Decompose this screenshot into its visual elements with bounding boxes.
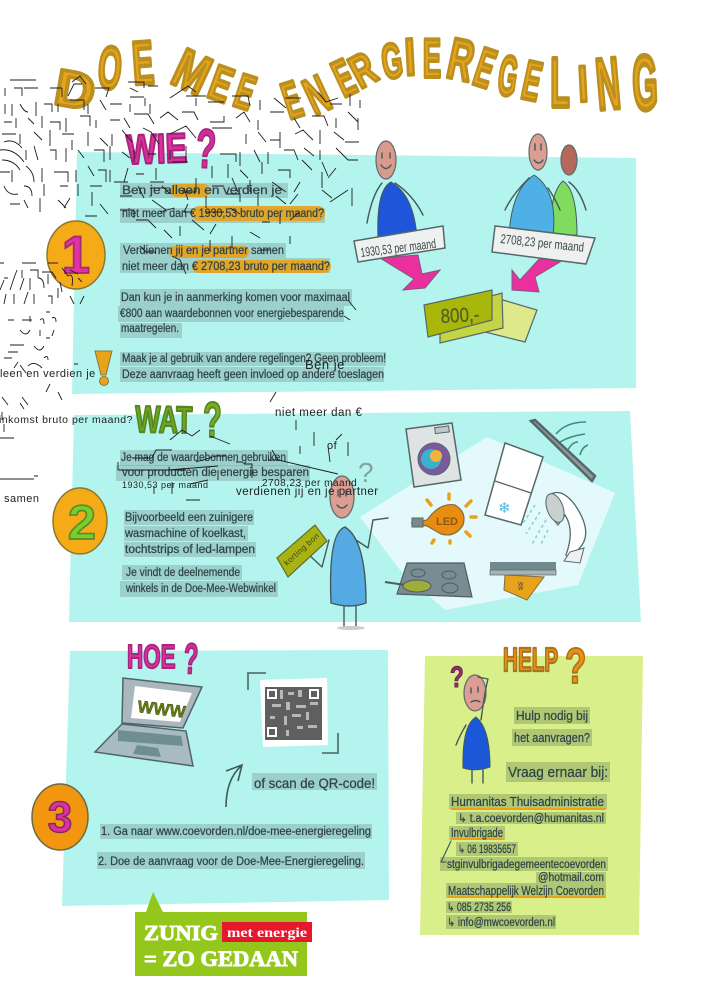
icon: scan brackets	[248, 673, 338, 753]
title: R	[442, 25, 480, 94]
text block: voucher amount: maatregelen.	[121, 323, 179, 335]
person: single: 1930,53 per maand	[360, 236, 437, 260]
text block: contacts: ↳ t.a.coevorden@humanitas.nl	[458, 813, 604, 825]
icon: vouchers: 800,-	[440, 303, 480, 327]
arrow: to qr code	[226, 765, 242, 807]
text block: voucher amount: Dan kun je in aanmerking komen voor maximaal	[121, 292, 350, 304]
figure: couple	[492, 134, 595, 292]
heading: wat: WAT	[135, 397, 193, 441]
badge: 1: 1	[62, 225, 90, 284]
title: L	[550, 45, 570, 122]
icon: sign	[277, 525, 327, 577]
heading: hoe: HOE	[127, 639, 176, 676]
ghost text fragments: verdienen jij en je partner	[236, 486, 379, 498]
title: M	[164, 37, 220, 107]
title: E	[202, 55, 240, 113]
text block: examples: tochtstrips of led-lampen	[125, 544, 255, 556]
text block: wie income: niet meer dan € 1930,53 bruto per maand?	[122, 208, 324, 220]
text block: wie income: Verdienen jij en je partner samen	[123, 245, 284, 257]
heading: help: ?	[565, 639, 586, 695]
text block: contacts: ↳ 06 19835657	[458, 844, 516, 856]
panel: wat	[69, 411, 641, 622]
text block: contacts: Maatschappelijk Welzijn Coevorden	[448, 884, 604, 898]
text block: contacts: stginvulbrigadegemeentecoevorden	[447, 859, 606, 871]
title: D	[50, 59, 99, 122]
panel: help	[420, 656, 643, 935]
title: E	[324, 48, 364, 108]
title: I	[577, 57, 589, 113]
icon: draught strip	[531, 420, 595, 481]
text block: other regulations	[120, 352, 386, 382]
text block: other regulations: Deze aanvraag heeft geen invloed op andere toeslagen	[122, 369, 384, 381]
ghost text fragments: of	[327, 440, 338, 452]
text block: steps: 2. Doe de aanvraag voor de Doe-Mee-Energieregeling.	[98, 856, 364, 868]
ghost text fragments: 1930,53 per maand	[122, 480, 209, 490]
text block: examples: Bijvoorbeeld een zuinigere	[125, 512, 253, 524]
heading: hoe	[127, 636, 199, 684]
text block: wie income: Ben je alleen en verdien je	[122, 185, 282, 197]
text block: examples: Je vindt de deelnemende	[126, 567, 240, 579]
text block: voucher amount: €800 aan waardebonnen voor energiebesparende	[120, 308, 344, 320]
glitch line fragments: lower left	[0, 263, 348, 500]
title: N	[593, 42, 623, 125]
icon: induction hob	[385, 563, 472, 597]
icon: door strip: ʬ	[518, 581, 524, 593]
heading: wie: WIE	[126, 124, 188, 173]
icon: led lamp: LED	[436, 516, 458, 528]
badge: 3: 3	[48, 793, 72, 842]
icon: washing machine	[406, 423, 461, 487]
text block: contacts	[440, 794, 608, 929]
title: O	[95, 34, 124, 103]
glitch line fragments: upper left	[0, 76, 360, 320]
heading: help: HELP	[503, 641, 558, 678]
text block: help question: het aanvragen?	[514, 730, 590, 745]
text block: other regulations: Maak je al gebruik van andere regelingen? Geen probleem!	[122, 353, 386, 365]
title: E	[275, 70, 309, 130]
text block: what: voor producten die energie besparen	[122, 467, 309, 479]
title: E	[130, 29, 156, 98]
heading: wie: ?	[194, 117, 218, 180]
text block: examples: wasmachine of koelkast,	[124, 528, 246, 540]
panel: hoe	[62, 650, 389, 906]
text block: contacts: ↳ 085 2735 256	[447, 902, 511, 914]
text block: voucher amount	[118, 289, 352, 338]
title: G	[631, 41, 659, 126]
title: I	[403, 27, 417, 86]
ghost text fragments: samen	[4, 493, 40, 505]
heading: wat	[135, 391, 222, 448]
title: R	[341, 42, 385, 99]
title: E	[467, 37, 503, 101]
title: G	[494, 45, 522, 109]
title: E	[423, 29, 441, 89]
badge: 3	[32, 784, 88, 850]
icon: shower head	[522, 491, 586, 563]
icon: vouchers	[424, 290, 537, 343]
text block: help question	[506, 707, 610, 782]
ghost text fragments: Ben je	[305, 357, 345, 372]
icon: qr code	[260, 678, 328, 747]
icon: exclamation mark	[95, 351, 112, 386]
person: holding sign	[307, 457, 388, 630]
person: help: ?	[450, 660, 464, 694]
text block: examples	[120, 510, 278, 597]
text block: wie income: niet meer dan € 2708,23 bruto per maand?	[122, 261, 330, 273]
text block: help question: Vraag ernaar bij:	[508, 764, 608, 781]
title: E	[517, 50, 547, 114]
title	[50, 25, 659, 130]
text block: help question: Hulp nodig bij	[516, 708, 588, 723]
text block: steps: 1. Ga naar www.coevorden.nl/doe-mee-energieregeling	[101, 826, 371, 838]
ghost text fragments: niet meer dan €	[275, 407, 363, 419]
icon: laptop	[95, 678, 202, 766]
text block: contacts: ↳ info@mwcoevorden.nl	[447, 917, 555, 929]
figure: couple: 2708,23 per maand	[500, 231, 585, 255]
badge: 2: 2	[68, 496, 96, 550]
panel: wie	[72, 152, 636, 394]
icon: sign: korting bon	[282, 531, 321, 567]
badge: 1	[47, 221, 105, 289]
heading: help	[503, 639, 586, 695]
text block: wie income	[120, 183, 331, 273]
logo: zunig met energie	[135, 892, 312, 976]
heading: wat: ?	[203, 391, 222, 448]
icon: fridge	[485, 443, 543, 525]
text block: contacts: @hotmail.com	[538, 872, 604, 884]
text: scan qr: of scan de QR-code!	[254, 775, 375, 791]
logo: zunig met energie: = ZO GEDAAN	[144, 946, 298, 971]
ghost text fragments	[0, 357, 379, 505]
text block: examples: winkels in de Doe-Mee-Webwinkel	[125, 583, 276, 595]
badge: 2	[53, 488, 107, 554]
title: E	[228, 64, 262, 121]
icon: led lamp	[411, 494, 476, 543]
icon: laptop: WWW	[137, 697, 188, 722]
icon: door strip	[490, 562, 556, 600]
title: N	[295, 64, 339, 126]
text block: contacts: Humanitas Thuisadministratie	[451, 795, 604, 809]
title: G	[378, 33, 406, 90]
text block: what: Je mag de waardebonnen gebruiken	[121, 452, 286, 464]
ghost text fragments: 2708,23 per maand	[262, 478, 357, 489]
text block: contacts: Invulbrigade	[451, 826, 503, 840]
logo: zunig met energie: ZUNIG	[144, 921, 218, 945]
text block: steps	[97, 824, 372, 869]
heading: hoe: ?	[182, 636, 199, 684]
backdrop: light shape behind products	[360, 437, 615, 610]
logo: zunig met energie: met energie	[227, 926, 307, 941]
person: help	[450, 660, 490, 783]
person: single	[354, 141, 445, 290]
icon: fridge: ❄	[498, 500, 511, 517]
text block: what	[116, 450, 310, 481]
ghost text fragments: inkomst bruto per maand?	[0, 414, 133, 426]
person: holding sign: ?	[358, 457, 374, 488]
heading: wie	[126, 117, 218, 180]
